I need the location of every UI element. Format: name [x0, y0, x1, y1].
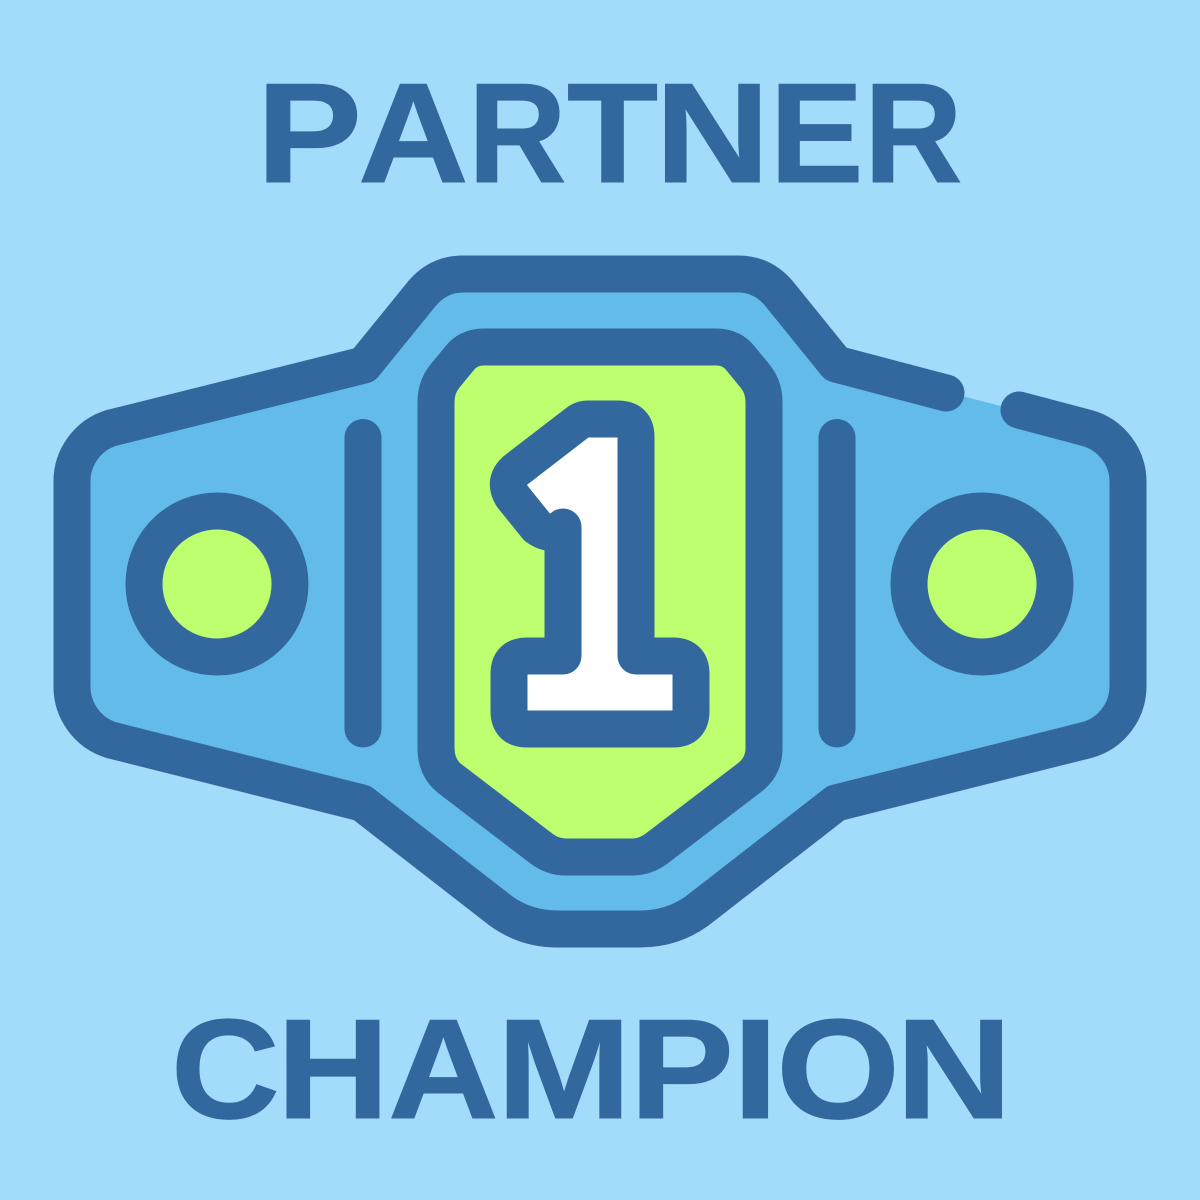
- left bar: [344, 438, 382, 729]
- belt outline: [72, 274, 1128, 929]
- title: CHAMPION: M: [496, 990, 632, 1149]
- center plate: [436, 347, 764, 857]
- title: CHAMPION: H: [277, 990, 389, 1149]
- title: PARTNER: T: [567, 54, 658, 213]
- right circle: [909, 511, 1055, 657]
- belt body: [72, 274, 1128, 929]
- title: CHAMPION: C: [171, 990, 280, 1149]
- title: CHAMPION: I: [732, 990, 779, 1149]
- left circle: [144, 511, 290, 657]
- title: PARTNER: P: [256, 54, 362, 213]
- title: PARTNER: E: [770, 54, 864, 213]
- title: PARTNER: R: [468, 54, 566, 213]
- number 1: [508, 419, 691, 729]
- title: PARTNER: R: [864, 54, 962, 213]
- title: CHAMPION: A: [388, 990, 499, 1149]
- right bar: [818, 438, 856, 729]
- title: CHAMPION: O: [776, 990, 900, 1149]
- championship belt: [72, 274, 1128, 929]
- title: PARTNER: N: [655, 54, 770, 213]
- title: PARTNER: A: [358, 54, 469, 213]
- title: CHAMPION: N: [896, 990, 1012, 1149]
- title: CHAMPION: P: [630, 990, 734, 1149]
